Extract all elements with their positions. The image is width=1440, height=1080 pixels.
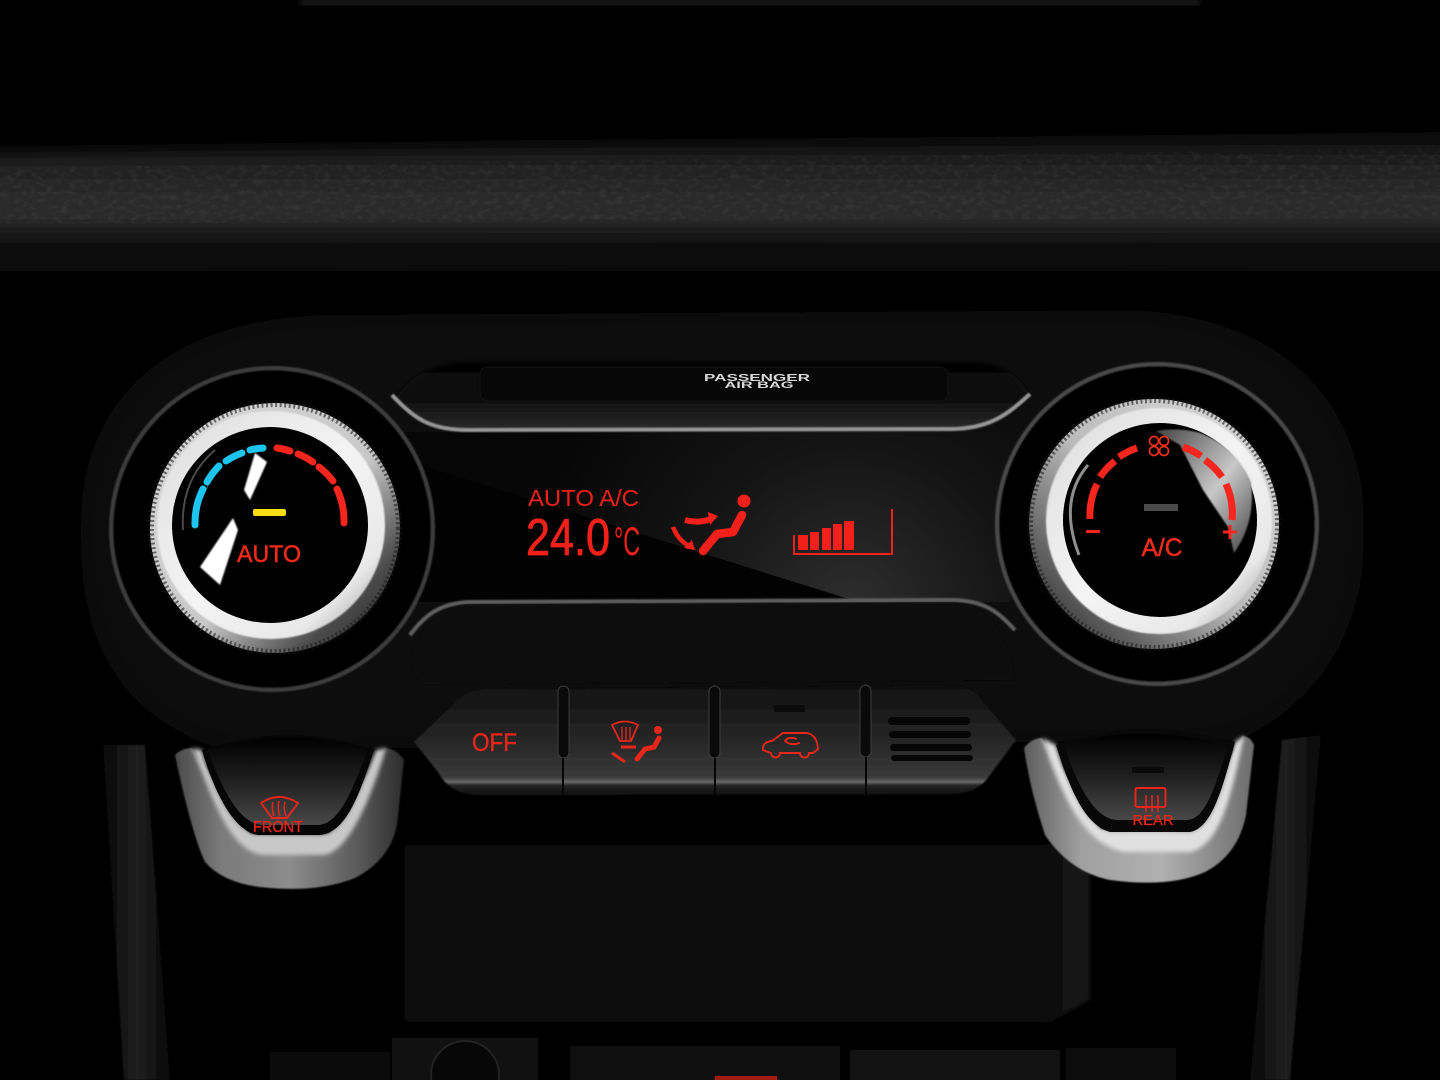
lower storage tray — [330, 845, 1090, 1022]
leather dash band — [0, 131, 1440, 277]
air bag text line: AIR BAG — [724, 380, 794, 390]
climate readout — [526, 485, 640, 567]
minus sign — [1086, 530, 1100, 533]
icon: seat airflow mode — [673, 494, 750, 551]
upper passenger airbag panel — [395, 362, 1030, 430]
blue temperature scale — [195, 448, 263, 525]
lower chrome line — [410, 600, 1015, 635]
right trim strip — [1250, 735, 1321, 1080]
icon: fan — [1150, 436, 1168, 456]
left trim strip — [103, 745, 170, 1080]
right dial — [997, 364, 1317, 684]
OFF label: OFF — [472, 729, 517, 757]
icon: defrost and seat — [612, 722, 662, 762]
icon: rear defroster — [1136, 788, 1166, 812]
AUTO A/C text: AUTO A/C — [528, 485, 639, 511]
front defrost button — [175, 735, 404, 889]
AUTO label: AUTO — [237, 541, 301, 568]
LED indicator — [1132, 767, 1164, 773]
vent slots — [888, 717, 973, 761]
panel below display — [410, 603, 1015, 684]
yellow indicator — [253, 509, 286, 516]
FRONT label: FRONT — [253, 819, 303, 836]
temperature value: 24.0 — [526, 509, 610, 567]
glass reflection — [1156, 429, 1252, 553]
A/C label: A/C — [1142, 534, 1182, 562]
icon: front defroster — [261, 797, 298, 818]
icon: recirculation car — [763, 733, 818, 758]
upper chrome line — [392, 394, 1030, 430]
LED indicator — [774, 705, 805, 712]
top edge trim — [300, 0, 1200, 5]
REAR label: REAR — [1132, 812, 1174, 829]
left dial — [111, 368, 433, 690]
rear defrost button — [1024, 729, 1254, 883]
red fan scale — [1090, 447, 1232, 520]
centre button bar — [414, 685, 1016, 796]
bottom console parts — [270, 1038, 1176, 1080]
plus sign — [1223, 525, 1237, 539]
passenger air bag text: PASSENGER — [704, 373, 811, 384]
white glass reflections — [200, 453, 267, 585]
console surround — [80, 310, 1365, 750]
inactive indicator — [1144, 504, 1178, 511]
button grooves — [558, 685, 871, 796]
red temperature scale — [277, 448, 344, 523]
fan level bar graph — [794, 509, 892, 554]
display window — [395, 432, 1010, 602]
degree unit: °C — [614, 520, 640, 564]
